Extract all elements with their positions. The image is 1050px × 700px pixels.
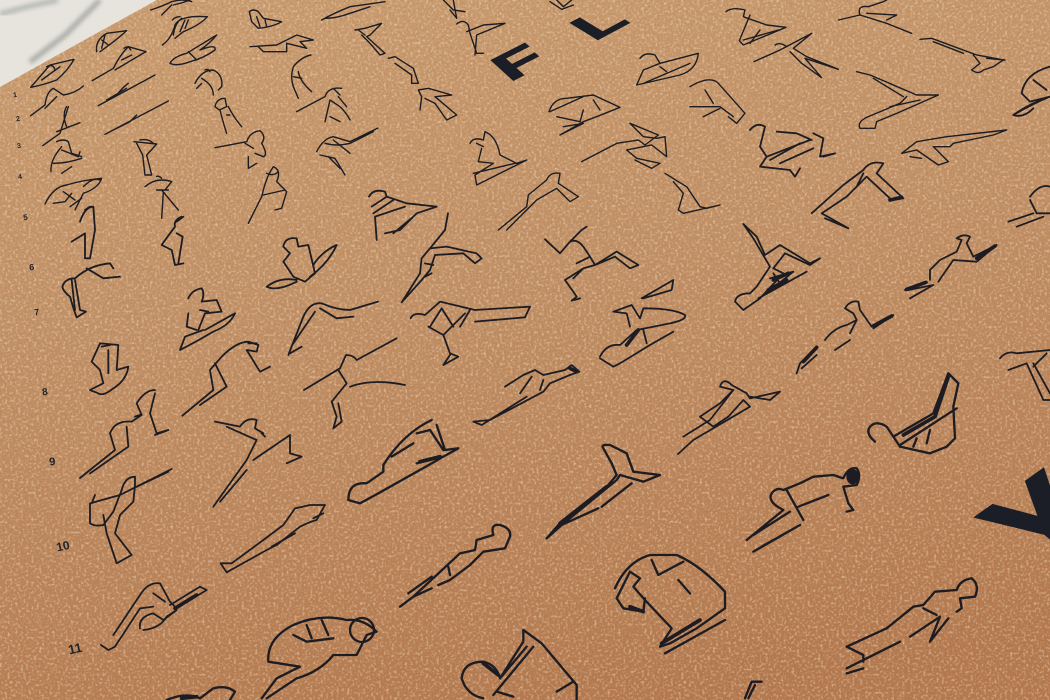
pose bbox=[288, 302, 378, 355]
pose bbox=[549, 95, 620, 135]
pose bbox=[847, 578, 977, 673]
pose bbox=[1013, 67, 1050, 116]
pose bbox=[747, 468, 859, 552]
figures: top left area bbox=[31, 0, 385, 223]
pose bbox=[292, 55, 312, 98]
pose bbox=[868, 373, 958, 453]
pose bbox=[45, 178, 102, 210]
figures: left middle area bbox=[62, 207, 405, 507]
pose bbox=[248, 167, 287, 223]
pose bbox=[355, 23, 385, 55]
pose bbox=[92, 47, 146, 81]
row numbers: 9 bbox=[48, 456, 56, 469]
pose bbox=[180, 288, 235, 350]
figures: bottom centre area bbox=[400, 445, 725, 700]
pose bbox=[920, 38, 1005, 72]
pose bbox=[221, 505, 325, 572]
pose bbox=[101, 583, 207, 650]
pose bbox=[550, 0, 573, 9]
pose bbox=[838, 0, 912, 33]
pose bbox=[457, 21, 505, 55]
pose bbox=[348, 420, 458, 503]
pose bbox=[745, 682, 762, 698]
pose bbox=[213, 419, 302, 507]
title letter L: L bbox=[559, 0, 640, 47]
pose bbox=[637, 53, 698, 85]
pose bbox=[317, 128, 378, 175]
pose bbox=[62, 263, 120, 317]
pose bbox=[215, 131, 265, 168]
pose bbox=[167, 687, 235, 700]
pose bbox=[90, 469, 172, 563]
pose bbox=[678, 381, 780, 454]
pose bbox=[750, 125, 835, 177]
pose bbox=[322, 2, 385, 20]
pose bbox=[902, 130, 1007, 165]
pose bbox=[250, 35, 313, 52]
pose bbox=[1000, 350, 1050, 400]
pose bbox=[615, 555, 725, 653]
pose bbox=[547, 445, 660, 538]
pose bbox=[690, 80, 745, 123]
pose bbox=[151, 0, 192, 15]
row numbers: 10 bbox=[55, 538, 71, 554]
pose bbox=[96, 31, 127, 52]
pose bbox=[267, 238, 337, 288]
figures: top right area bbox=[690, 0, 1050, 228]
row numbers: 8 bbox=[41, 387, 49, 398]
row numbers bbox=[13, 92, 83, 657]
row numbers: 11 bbox=[67, 640, 83, 657]
title letter F: F bbox=[481, 36, 556, 89]
pose bbox=[105, 101, 168, 134]
figures: bottom right area bbox=[745, 468, 977, 698]
row numbers: 6 bbox=[28, 262, 35, 272]
pose bbox=[905, 235, 997, 298]
pose bbox=[162, 217, 183, 265]
figures: bottom left area bbox=[90, 469, 377, 700]
figures: centre area bbox=[348, 213, 685, 503]
pose bbox=[51, 140, 82, 173]
pose bbox=[754, 33, 838, 78]
figures: top centre area bbox=[355, 0, 720, 240]
pose bbox=[98, 75, 155, 106]
pose bbox=[473, 365, 579, 425]
pose bbox=[215, 98, 242, 133]
pose bbox=[80, 390, 168, 478]
pose bbox=[665, 173, 720, 213]
pose bbox=[162, 16, 207, 45]
row numbers: 2 bbox=[16, 116, 21, 123]
pose bbox=[498, 173, 578, 230]
pose bbox=[735, 224, 820, 310]
pose bbox=[411, 302, 530, 365]
pose bbox=[388, 57, 418, 83]
row numbers: 5 bbox=[23, 213, 29, 222]
marble surface corner bbox=[0, 0, 157, 87]
pose bbox=[857, 72, 938, 128]
row numbers: 1 bbox=[13, 92, 18, 99]
pose bbox=[726, 9, 786, 45]
pose bbox=[90, 343, 128, 394]
pose bbox=[1008, 186, 1050, 227]
pose bbox=[72, 207, 95, 258]
pose bbox=[369, 191, 437, 240]
pose bbox=[400, 525, 510, 607]
pose bbox=[418, 88, 457, 120]
pose bbox=[402, 213, 482, 302]
row numbers: 7 bbox=[33, 307, 40, 317]
pose bbox=[304, 338, 405, 428]
pose bbox=[43, 107, 80, 146]
pose bbox=[582, 123, 667, 168]
pose bbox=[600, 280, 685, 367]
pose bbox=[134, 140, 157, 175]
pose bbox=[470, 132, 527, 185]
pose bbox=[170, 35, 217, 65]
pose bbox=[443, 0, 465, 18]
pose bbox=[182, 342, 270, 416]
pose bbox=[262, 618, 377, 698]
pose bbox=[145, 176, 178, 218]
row numbers: 4 bbox=[18, 174, 23, 181]
figures: right middle area bbox=[678, 224, 1050, 454]
pose bbox=[31, 86, 83, 116]
pose bbox=[249, 10, 282, 28]
row numbers: 3 bbox=[17, 143, 22, 150]
pose bbox=[462, 630, 577, 700]
pose bbox=[195, 69, 222, 95]
pose bbox=[797, 301, 893, 373]
pose bbox=[297, 88, 350, 122]
pose bbox=[812, 162, 903, 228]
pose bbox=[545, 227, 638, 301]
pose bbox=[31, 59, 74, 87]
